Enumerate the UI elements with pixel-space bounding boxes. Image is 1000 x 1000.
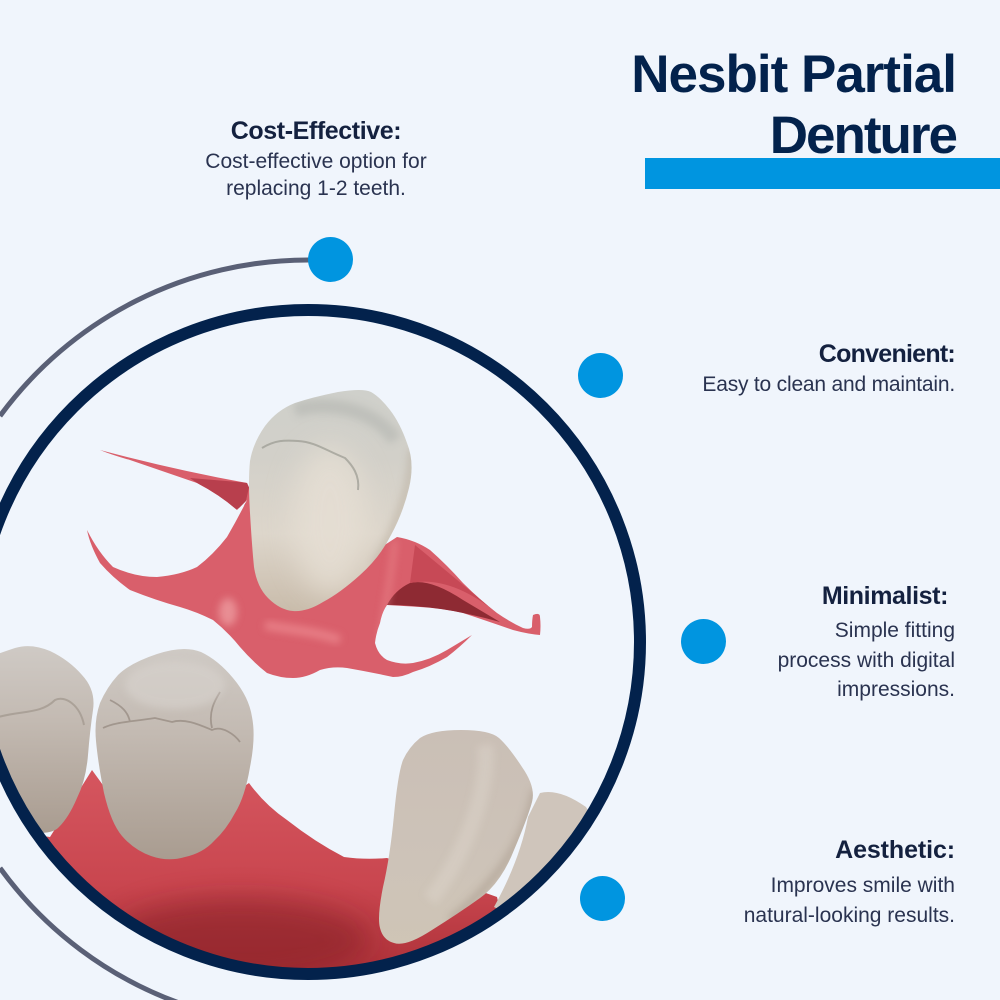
connecting arc (0, 260, 310, 1000)
text: Minimalist: Simple fitting (835, 619, 955, 642)
text: Convenient: Convenient: (819, 340, 955, 368)
text: Aesthetic: Improves smile with (771, 874, 955, 897)
dot: Cost-Effective (308, 237, 353, 282)
lower jaw with teeth (0, 646, 600, 1000)
illustration: denture in circle with connecting arc (0, 258, 646, 1000)
partial denture pink base (87, 450, 540, 678)
dot: Convenient (578, 353, 623, 398)
text: Minimalist: impressions. (837, 678, 955, 701)
canine (379, 730, 533, 944)
wing shadow (387, 582, 500, 622)
gum (46, 770, 498, 968)
text: Aesthetic (744, 836, 955, 926)
title: Denture (770, 106, 956, 165)
back molar (0, 646, 94, 833)
text: Cost-Effective: Cost-effective option for (205, 150, 427, 172)
text: Cost-Effective: replacing 1-2 teeth. (226, 176, 406, 200)
wing inner shade (410, 545, 497, 613)
text: Minimalist: Minimalist: (822, 582, 948, 610)
text: Cost-Effective: Cost-Effective: (231, 117, 401, 145)
dot: Minimalist (681, 619, 726, 664)
main tooth (249, 390, 412, 611)
title: Nesbit Partial (631, 45, 956, 104)
text: Minimalist (778, 582, 955, 701)
text: Convenient: Easy to clean and maintain. (702, 373, 955, 396)
spike shade (190, 478, 250, 510)
navy ring (0, 310, 640, 974)
molar (96, 649, 254, 859)
gum shadow (110, 898, 370, 982)
title accent bar (645, 158, 1000, 189)
text: Cost-Effective (205, 117, 427, 200)
dot: Aesthetic (580, 876, 625, 921)
side tooth (494, 792, 588, 908)
title (631, 45, 956, 165)
text: Aesthetic: natural-looking results. (744, 904, 955, 926)
text: Minimalist: process with digital (778, 648, 955, 672)
text: Convenient (702, 340, 955, 396)
text: Aesthetic: Aesthetic: (835, 836, 955, 864)
highlights (219, 598, 237, 626)
